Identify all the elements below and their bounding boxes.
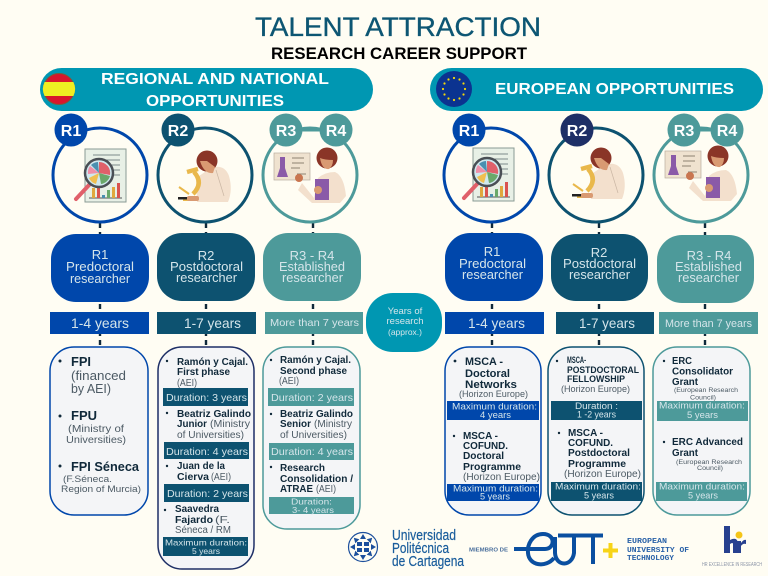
list: R3-R4 European programmes bbox=[653, 347, 750, 515]
list: R3-R4 European programmes: ERC bbox=[672, 356, 692, 367]
banner: regional and national bbox=[40, 68, 373, 111]
logo: Universidad Politécnica de Cartagena: Politécnica bbox=[392, 541, 450, 557]
callout: years of research bbox=[366, 293, 442, 352]
list: R2 European programmes: MSCA- bbox=[567, 355, 586, 365]
panel: regional and national opportunities bbox=[40, 68, 373, 569]
list: R2 European programmes: (Horizon Europe) bbox=[564, 469, 641, 480]
years bar: 1-7: 1-7 years bbox=[184, 315, 241, 331]
list: R1 European programmes: MSCA - bbox=[463, 431, 498, 442]
list: R3-R4 programmes: Consolidation / bbox=[280, 474, 353, 485]
list: R2 programmes: of Universities) bbox=[177, 430, 244, 441]
list: R2 programmes: 5 years bbox=[192, 546, 220, 556]
list: R1 European programmes: Maximum duration: bbox=[452, 402, 537, 412]
connectors bbox=[492, 223, 705, 347]
logo: Universidad Politécnica de Cartagena: de Cartagena bbox=[392, 554, 465, 570]
role box: R3-R4 established bbox=[263, 233, 361, 301]
role box: R1 predoctoral: Predoctoral bbox=[66, 259, 134, 274]
title: TALENT ATTRACTION bbox=[255, 12, 541, 42]
icon: EUT+ mark bbox=[514, 534, 618, 564]
list: R2 European programmes: POSTDOCTORAL bbox=[567, 365, 639, 375]
list: R2 programmes: (F. bbox=[215, 515, 230, 526]
list: R1 European programmes: Doctoral bbox=[465, 368, 510, 380]
list: R2 programmes: Cierva bbox=[177, 472, 209, 483]
role box: R2 postdoctoral: Postdoctoral bbox=[170, 259, 243, 274]
years bar: 1-4 bbox=[445, 312, 544, 334]
list: R3-R4 programmes: Duration: bbox=[291, 496, 332, 506]
list: R3-R4 programmes: of Universities) bbox=[280, 430, 347, 441]
years bar: 1-7: 1-7 years bbox=[579, 315, 635, 331]
logo: HR Excellence in Research bbox=[702, 526, 762, 568]
years bar: 1-4 bbox=[50, 312, 149, 334]
badge: R2: R2 bbox=[168, 123, 188, 140]
role box: R1 predoctoral: R1 bbox=[484, 244, 500, 259]
list: R1 programmes: by AEI) bbox=[71, 381, 111, 396]
list: R2 European programmes: Programme bbox=[568, 459, 626, 470]
R2 circle with illustration bbox=[158, 114, 252, 222]
R3-R4 circle with illustration bbox=[654, 114, 748, 222]
role box: R1 predoctoral: researcher bbox=[462, 267, 524, 282]
list: R1 European programmes: COFUND. bbox=[463, 441, 508, 452]
logo: Universidad Politécnica de Cartagena: Universidad bbox=[392, 528, 456, 544]
logo: Universidad Politécnica de Cartagena bbox=[348, 528, 465, 570]
badge: R2: R2 bbox=[567, 123, 587, 140]
list: R1 programmes: (financed bbox=[71, 368, 126, 383]
connectors bbox=[100, 223, 313, 347]
list: R1 European programmes: Maximum duration: bbox=[453, 484, 538, 494]
text: European University of Technology: EUROPEAN bbox=[627, 538, 667, 546]
role box: R3-R4 established bbox=[657, 235, 754, 303]
list: R3-R4 programmes: Beatriz Galindo bbox=[280, 409, 353, 420]
list: R2 European programmes: COFUND. bbox=[568, 438, 613, 449]
years bar: more than 7 bbox=[659, 312, 758, 334]
list: R3-R4 European programmes: (European Research bbox=[676, 459, 742, 466]
list: R1 European programmes: Doctoral bbox=[463, 451, 504, 462]
role box: R1 predoctoral: researcher bbox=[70, 271, 131, 286]
icon: EU flag bbox=[436, 71, 472, 107]
list: R3-R4 programmes: Ramón y Cajal. bbox=[280, 355, 351, 366]
banner text: REGIONAL AND NATIONAL bbox=[101, 71, 329, 88]
role box: R2 postdoctoral: Postdoctoral bbox=[563, 256, 636, 271]
badge: R3: R3 bbox=[276, 123, 296, 140]
role box: R2 postdoctoral bbox=[157, 233, 255, 301]
list: R3-R4 European programmes: Council) bbox=[690, 394, 716, 402]
R3-R4 circle with illustration bbox=[263, 114, 357, 222]
role box: R2 postdoctoral: R2 bbox=[591, 245, 607, 260]
list: R3-R4 European programmes: Maximum duration: bbox=[659, 400, 745, 410]
list: R1 European programmes: Programme bbox=[463, 462, 521, 473]
role box: R1 predoctoral: Predoctoral bbox=[459, 256, 526, 271]
R2 circle with illustration bbox=[549, 114, 643, 222]
list: R1 European programmes: 4 years bbox=[480, 410, 512, 420]
list: R2 programmes: First phase bbox=[177, 367, 230, 378]
list: R3-R4 programmes: Duration: 4 years bbox=[271, 446, 353, 458]
callout: years of research: (approx.) bbox=[388, 327, 422, 337]
list: R1 European programmes: Networks bbox=[465, 379, 517, 391]
list: R2 European programmes: Duration : bbox=[575, 401, 618, 411]
list: R3-R4 programmes: Second phase bbox=[280, 366, 347, 377]
callout: years of research: Years of bbox=[388, 306, 423, 317]
role box: R2 postdoctoral: researcher bbox=[569, 267, 631, 282]
list: R1 programmes: FPU bbox=[71, 409, 97, 423]
list: R2 European programmes: 5 years bbox=[584, 490, 615, 500]
list: R3-R4 programmes: Duration: 2 years bbox=[271, 392, 353, 404]
list: R2 programmes: Duration: 2 years bbox=[167, 488, 248, 500]
list: R2 programmes: Duration: 3 years bbox=[166, 392, 247, 404]
list: R3-R4 European programmes: Council) bbox=[697, 465, 723, 472]
years bar: 1-4: 1-4 years bbox=[71, 315, 129, 331]
list: R2 programmes: (AEI) bbox=[177, 378, 197, 389]
list: R3-R4 European programmes: ERC Advanced bbox=[672, 437, 743, 448]
list: R2 programmes: Maximum duration: bbox=[165, 538, 247, 548]
role box: R2 postdoctoral: R2 bbox=[198, 248, 214, 263]
role box: R1 predoctoral bbox=[51, 234, 149, 302]
role box: R3-R4 established: researcher bbox=[678, 270, 740, 285]
logo: EUT+ bbox=[469, 534, 690, 564]
list: R3-R4 programmes: Research bbox=[280, 463, 325, 474]
role box: R2 postdoctoral bbox=[551, 234, 648, 301]
list: R1 programmes bbox=[50, 347, 148, 515]
list: R2 European programmes: (Horizon Europe) bbox=[561, 384, 630, 394]
list: R3-R4 European programmes: Maximum duration: bbox=[659, 482, 745, 492]
list: R1 European programmes: MSCA - bbox=[465, 356, 503, 368]
icon: Spanish flag bbox=[43, 74, 75, 104]
logo: EUT+: MIEMBRO DE bbox=[469, 548, 508, 554]
banner: European bbox=[430, 68, 763, 111]
list: R2 programmes: Junior bbox=[177, 419, 207, 430]
list: R2 programmes: Duration: 4 years bbox=[166, 446, 248, 458]
list: R2 programmes: Juan de la bbox=[177, 461, 225, 472]
list: R3-R4 European programmes: 5 years bbox=[688, 490, 719, 500]
list: R2 European programmes bbox=[548, 347, 644, 515]
list: R2 programmes: Saavedra bbox=[175, 504, 219, 515]
list: R2 European programmes: MSCA - bbox=[568, 428, 603, 439]
list: R3-R4 European programmes: (European Research bbox=[674, 387, 738, 394]
list: R2 programmes: Ramón y Cajal. bbox=[177, 357, 248, 368]
list: R2 programmes: Beatriz Galindo bbox=[177, 409, 251, 420]
role box: R3-R4 established: R3 - R4 bbox=[687, 248, 731, 263]
years bar: 1-7 bbox=[556, 312, 654, 334]
badge: R4: R4 bbox=[326, 123, 346, 140]
role box: R1 predoctoral: R1 bbox=[92, 247, 108, 262]
R1 circle with illustration bbox=[53, 114, 147, 222]
list: R2 programmes: Séneca / RM bbox=[175, 525, 231, 536]
list: R3-R4 programmes: 3- 4 years bbox=[292, 505, 334, 515]
banner text: OPPORTUNITIES bbox=[146, 93, 284, 110]
list: R3-R4 programmes: (Ministry bbox=[314, 419, 352, 430]
text: European University of Technology: TECHNOLOGY bbox=[627, 555, 675, 563]
years bar: more than 7: More than 7 years bbox=[270, 317, 359, 329]
years bar: more than 7: More than 7 years bbox=[665, 318, 752, 330]
role box: R3-R4 established: Established bbox=[279, 259, 345, 274]
role box: R1 predoctoral bbox=[445, 233, 543, 301]
list: R1 programmes: FPI bbox=[71, 355, 91, 369]
badge: R3: R3 bbox=[674, 123, 694, 140]
list: R3-R4 European programmes: Consolidator bbox=[672, 366, 733, 378]
list: R3-R4 programmes: (AEI) bbox=[316, 484, 336, 495]
list: R3-R4 European programmes: 5 years bbox=[687, 410, 719, 420]
list: R3-R4 programmes: ATRAE bbox=[280, 484, 313, 495]
badge: R4: R4 bbox=[717, 123, 737, 140]
text: European University of Technology: UNIVERSITY OF bbox=[627, 547, 690, 555]
list: R1 programmes: Universities) bbox=[66, 434, 126, 446]
list: R1 programmes: Region of Murcia) bbox=[61, 484, 141, 495]
list: R2 European programmes: Maximum duration: bbox=[555, 482, 641, 492]
list: R2 programmes: Fajardo bbox=[175, 515, 213, 526]
list: R3-R4 European programmes: Grant bbox=[672, 377, 699, 388]
callout: years of research: research bbox=[387, 316, 423, 327]
list: R2 programmes bbox=[158, 347, 254, 569]
list: R3-R4 programmes bbox=[263, 347, 360, 529]
years bar: 1-4: 1-4 years bbox=[468, 315, 525, 331]
subtitle: RESEARCH CAREER SUPPORT bbox=[271, 44, 528, 63]
role box: R3-R4 established: R3 - R4 bbox=[290, 248, 334, 263]
list: R1 European programmes: 5 years bbox=[480, 492, 511, 502]
badge: R1: R1 bbox=[61, 123, 81, 140]
banner text bbox=[101, 71, 329, 110]
list: R3-R4 European programmes: Grant bbox=[672, 448, 699, 459]
list: R2 programmes: (AEI) bbox=[211, 472, 231, 483]
years bar: more than 7 bbox=[265, 312, 363, 334]
list: R2 European programmes: Postdoctoral bbox=[568, 448, 630, 459]
icon: university emblem bbox=[348, 532, 378, 562]
list: R1 European programmes bbox=[445, 347, 541, 515]
banner text: EUROPEAN OPPORTUNITIES bbox=[495, 81, 734, 98]
list: R2 programmes: (Ministry bbox=[210, 419, 250, 430]
text: European University of Technology bbox=[627, 538, 690, 563]
badge: R1: R1 bbox=[459, 123, 479, 140]
years bar: 1-7 bbox=[157, 312, 256, 334]
role box: R3-R4 established: researcher bbox=[282, 270, 344, 285]
list: R2 European programmes: 1 -2 years bbox=[577, 410, 616, 420]
list: R1 programmes: (F.Séneca. bbox=[63, 474, 112, 485]
list: R1 programmes: (Ministry of bbox=[68, 423, 124, 435]
list: R3-R4 programmes: (AEI) bbox=[279, 376, 299, 387]
list: R1 programmes: FPI Séneca bbox=[71, 460, 140, 474]
list: R2 European programmes: FELLOWSHIP bbox=[567, 374, 625, 384]
list: R1 European programmes: (Horizon Europe) bbox=[459, 389, 528, 399]
role box: R3-R4 established: Established bbox=[675, 259, 742, 274]
panel: European opportunities bbox=[430, 68, 763, 515]
R1 circle with illustration bbox=[444, 114, 538, 222]
role box: R2 postdoctoral: researcher bbox=[176, 270, 238, 285]
list: R1 European programmes: (Horizon Europe) bbox=[463, 472, 540, 483]
list: R3-R4 programmes: Senior bbox=[280, 419, 311, 430]
